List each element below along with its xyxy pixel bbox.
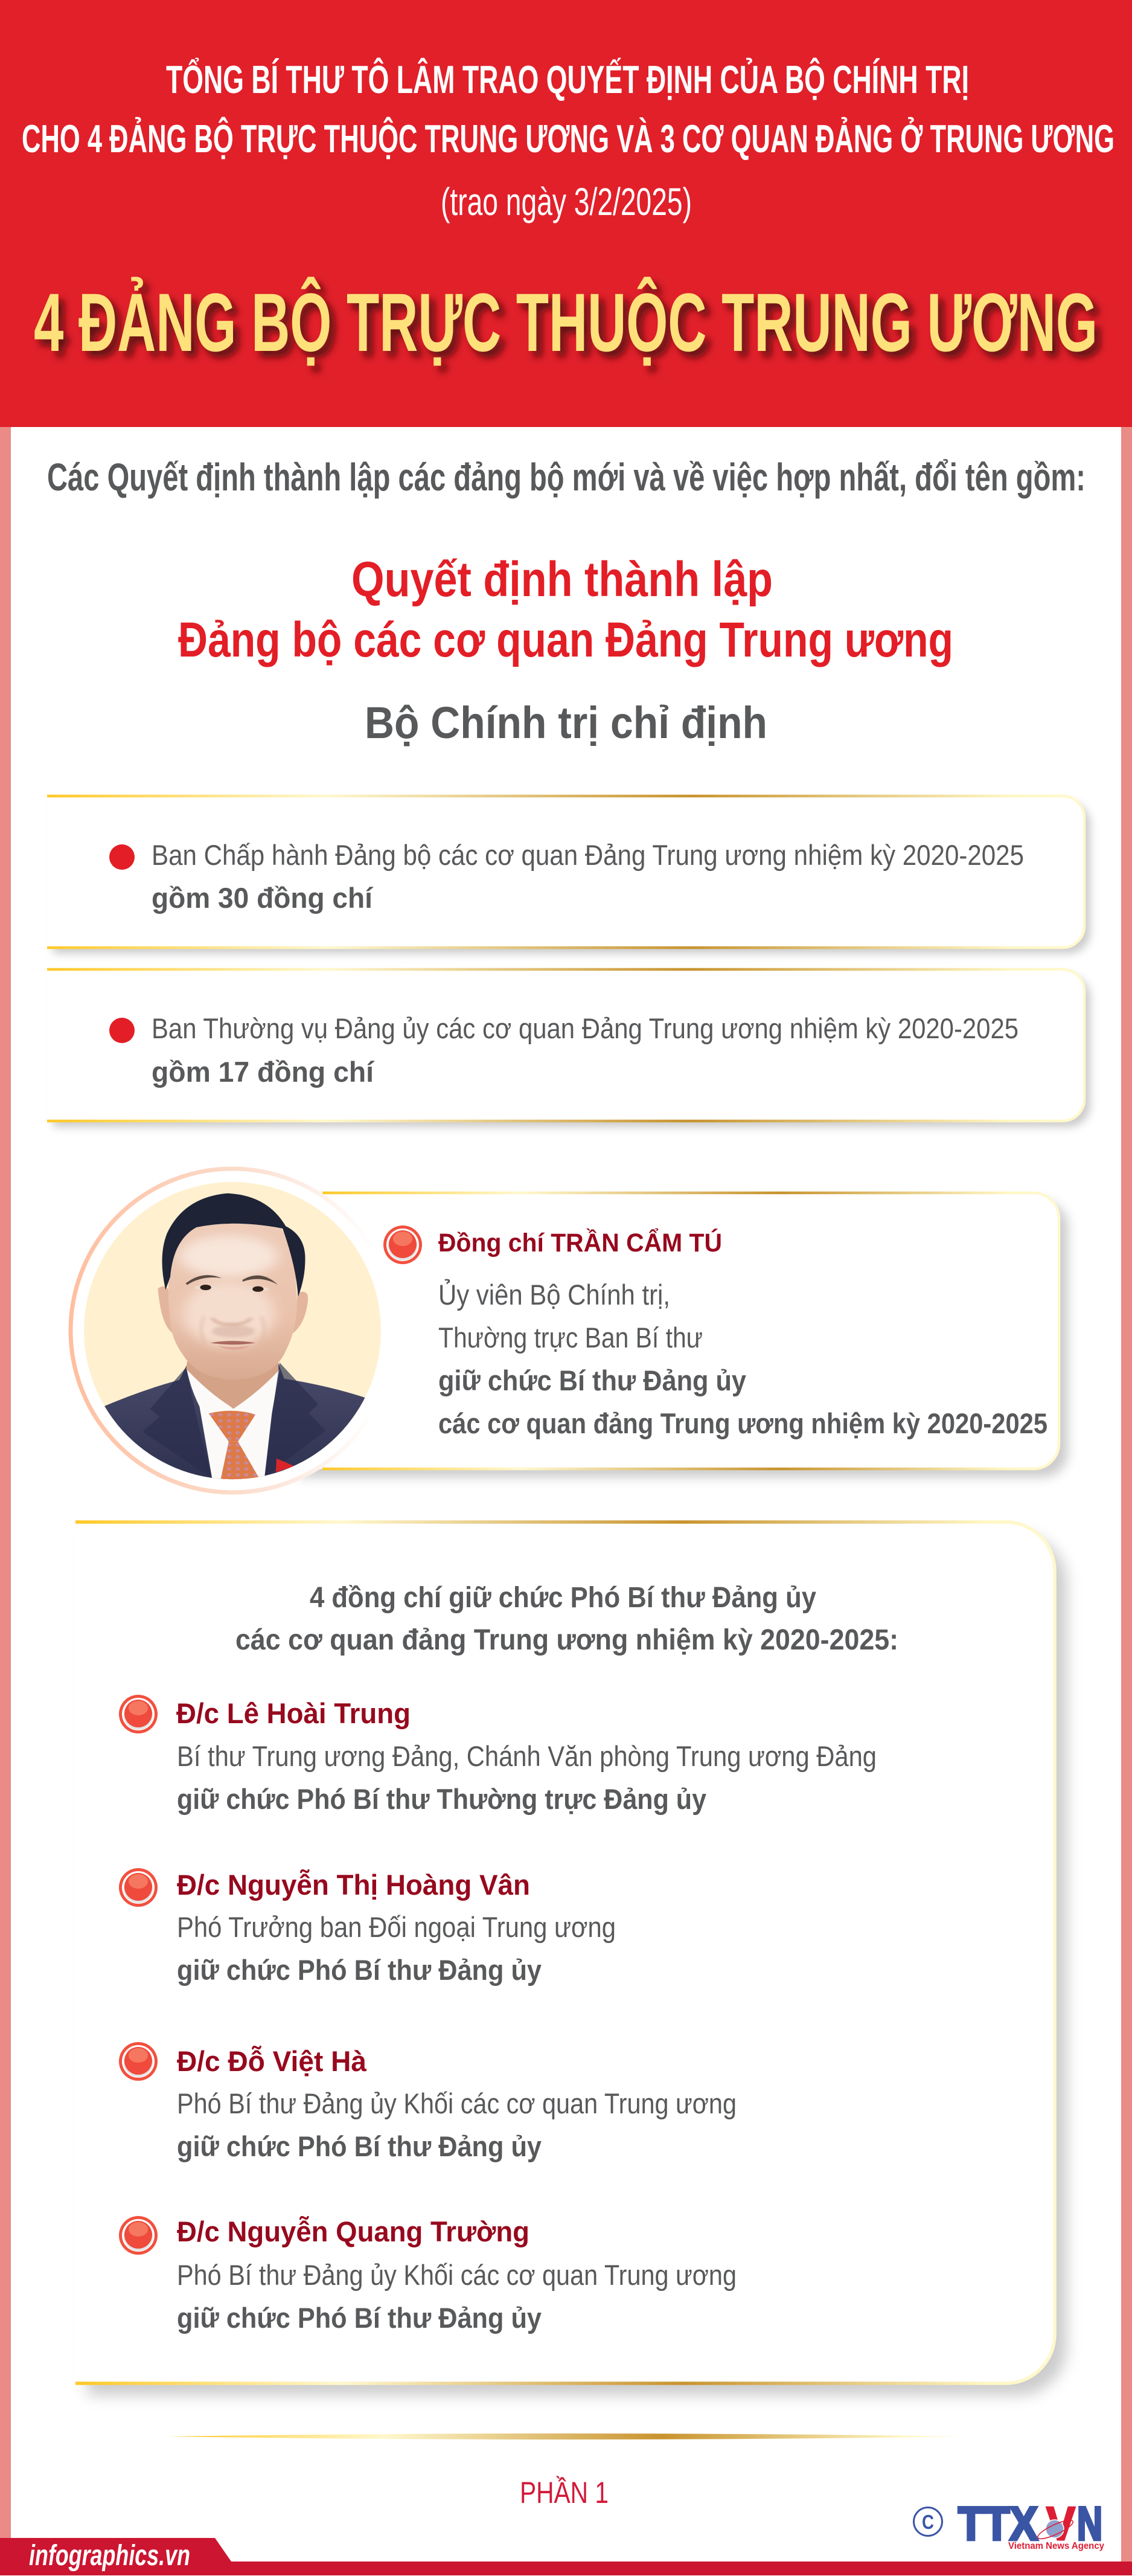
panel heading: các cơ quan đảng Trung ương nhiệm kỳ 2020-2025:: [235, 1624, 898, 1656]
logo: TTXVN: Vietnam News Agency: [1008, 2541, 1104, 2551]
card text: gồm 17 đồng chí: [152, 1056, 375, 1088]
person: Đỗ Việt Hà: Đ/c Đỗ Việt Hà: [177, 2045, 367, 2077]
secretary name: Đồng chí TRẦN CẨM TÚ: [438, 1228, 722, 1257]
logo: TTXVN: N: [1077, 2497, 1102, 2550]
right side band: [1121, 427, 1132, 2562]
logo: TTXVN: [914, 2497, 1104, 2551]
footer bar: [0, 2538, 1132, 2575]
person: Lê Hoài Trung: Bí thư Trung ương Đảng, Chánh Văn phòng Trung ương Đảng: [177, 1740, 877, 1772]
panel heading: 4 đồng chí giữ chức Phó Bí thư Đảng ủy: [310, 1582, 816, 1614]
card text: [152, 839, 1024, 914]
card: executive committee: [47, 796, 1084, 948]
logo: TTXVN: V: [1046, 2497, 1075, 2550]
panel heading: [235, 1582, 898, 1656]
red section heading: [178, 552, 953, 667]
part label: PHẦN 1: [520, 2476, 609, 2510]
red section heading: Quyết định thành lập: [351, 552, 773, 607]
secretary text: [438, 1228, 1047, 1439]
person: Đỗ Việt Hà: [119, 2042, 737, 2162]
person: Nguyễn Quang Trường: giữ chức Phó Bí thư Đảng ủy: [177, 2302, 542, 2334]
panel: deputy secretaries: [75, 1522, 1055, 2383]
copyright mark: C: [922, 2511, 934, 2533]
header panel: [0, 0, 1132, 427]
red bullet: [109, 844, 135, 870]
red section heading: Đảng bộ các cơ quan Đảng Trung ương: [178, 612, 953, 667]
copyright mark: [914, 2508, 942, 2536]
date line: (trao ngày 3/2/2025): [441, 180, 692, 223]
icon: red button: [383, 1225, 422, 1264]
portrait: Trần Cẩm Tú: [69, 1167, 396, 1494]
secretary text: giữ chức Bí thư Đảng ủy: [438, 1364, 746, 1396]
person: Lê Hoài Trung: giữ chức Phó Bí thư Thường trực Đảng ủy: [177, 1783, 706, 1815]
person: Nguyễn Quang Trường: Phó Bí thư Đảng ủy Khối các cơ quan Trung ương: [177, 2259, 737, 2291]
person: Nguyễn Thị Hoàng Vân: giữ chức Phó Bí thư Đảng ủy: [177, 1954, 542, 1986]
card text: Ban Thường vụ Đảng ủy các cơ quan Đảng Trung ương nhiệm kỳ 2020-2025: [152, 1012, 1018, 1044]
person: Nguyễn Quang Trường: [119, 2215, 737, 2334]
logo: TTXVN: TTX: [958, 2497, 1038, 2550]
grey sub heading: Bộ Chính trị chỉ định: [365, 698, 767, 748]
person: Lê Hoài Trung: [119, 1695, 877, 1815]
card text: [152, 1012, 1018, 1088]
person: Nguyễn Thị Hoàng Vân: [119, 1868, 616, 1986]
gold lens divider: [168, 2433, 964, 2439]
header title: [22, 57, 1114, 161]
person: Lê Hoài Trung: Đ/c Lê Hoài Trung: [176, 1697, 411, 1729]
secretary text: các cơ quan đảng Trung ương nhiệm kỳ 2020-2025: [438, 1407, 1047, 1439]
secretary text: Ủy viên Bộ Chính trị,: [438, 1279, 670, 1311]
person: Nguyễn Thị Hoàng Vân: Phó Trưởng ban Đối ngoại Trung ương: [177, 1911, 616, 1943]
site name: infographics.vn: [29, 2540, 190, 2572]
card: standing committee: [47, 969, 1084, 1121]
secretary text: Thường trực Ban Bí thư: [438, 1322, 703, 1354]
card text: gồm 30 đồng chí: [152, 882, 374, 914]
person: Nguyễn Thị Hoàng Vân: Đ/c Nguyễn Thị Hoàng Vân: [177, 1869, 530, 1901]
person: Đỗ Việt Hà: giữ chức Phó Bí thư Đảng ủy: [177, 2130, 542, 2162]
person: Đỗ Việt Hà: Phó Bí thư Đảng ủy Khối các cơ quan Trung ương: [177, 2087, 737, 2119]
person: Nguyễn Quang Trường: Đ/c Nguyễn Quang Trường: [177, 2215, 529, 2247]
card text: Ban Chấp hành Đảng bộ các cơ quan Đảng Trung ương nhiệm kỳ 2020-2025: [152, 839, 1024, 871]
card: secretary: [290, 1193, 1059, 1469]
red bullet: [109, 1018, 135, 1043]
left side band: [0, 427, 11, 2562]
